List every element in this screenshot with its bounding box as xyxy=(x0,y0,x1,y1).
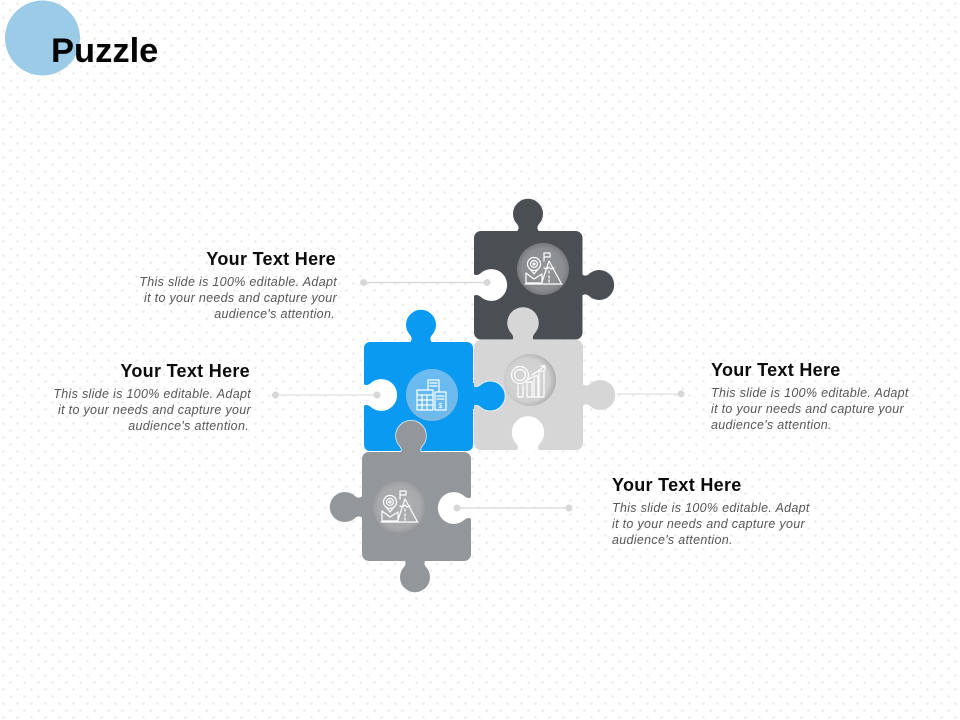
connector: middle left xyxy=(272,392,380,398)
text block: middle left: This slide is 100% editable. Adapt xyxy=(53,387,251,401)
text block: middle left: Your Text Here xyxy=(120,361,250,381)
text block: bottom right: it to your needs and capture your xyxy=(612,517,806,531)
puzzle piece: dark xyxy=(472,199,614,340)
puzzle piece: mid grey xyxy=(330,421,473,592)
text block: middle left: audience's attention. xyxy=(128,419,249,433)
puzzle piece: blue xyxy=(362,310,505,451)
text block: middle right: Your Text Here xyxy=(711,360,841,380)
text block: top left: This slide is 100% editable. Adapt xyxy=(139,275,337,289)
text block: middle right: audience's attention. xyxy=(711,418,832,432)
text block: top left: Your Text Here xyxy=(206,249,336,269)
icon: calculator and documents: $ xyxy=(439,403,443,410)
title: Puzzle xyxy=(51,32,158,70)
icon: target and mountain xyxy=(381,491,418,522)
title accent circle xyxy=(5,0,80,76)
icon: magnifier and bars xyxy=(512,366,545,397)
connector: top left xyxy=(360,279,490,286)
text block: top left: audience's attention. xyxy=(214,307,335,321)
text block: middle left: it to your needs and capture your xyxy=(58,403,252,417)
icon: target and mountain xyxy=(525,253,562,284)
text block: bottom right: Your Text Here xyxy=(612,475,742,495)
text block: top left xyxy=(139,249,338,321)
connector: bottom right xyxy=(454,504,572,512)
puzzle piece: light grey xyxy=(474,307,615,452)
text block: middle right xyxy=(711,360,909,432)
text block: middle right: This slide is 100% editable. Adapt xyxy=(711,386,909,400)
text block: bottom right: This slide is 100% editable. Adapt xyxy=(612,501,810,515)
text block: bottom right: audience's attention. xyxy=(612,533,733,547)
text block: middle right: it to your needs and capture your xyxy=(711,402,905,416)
connector: middle right xyxy=(617,390,684,398)
text block: top left: it to your needs and capture your xyxy=(144,291,338,305)
text block: bottom right xyxy=(612,475,810,547)
text block: middle left xyxy=(53,361,252,433)
icon: calculator and documents xyxy=(417,380,446,410)
